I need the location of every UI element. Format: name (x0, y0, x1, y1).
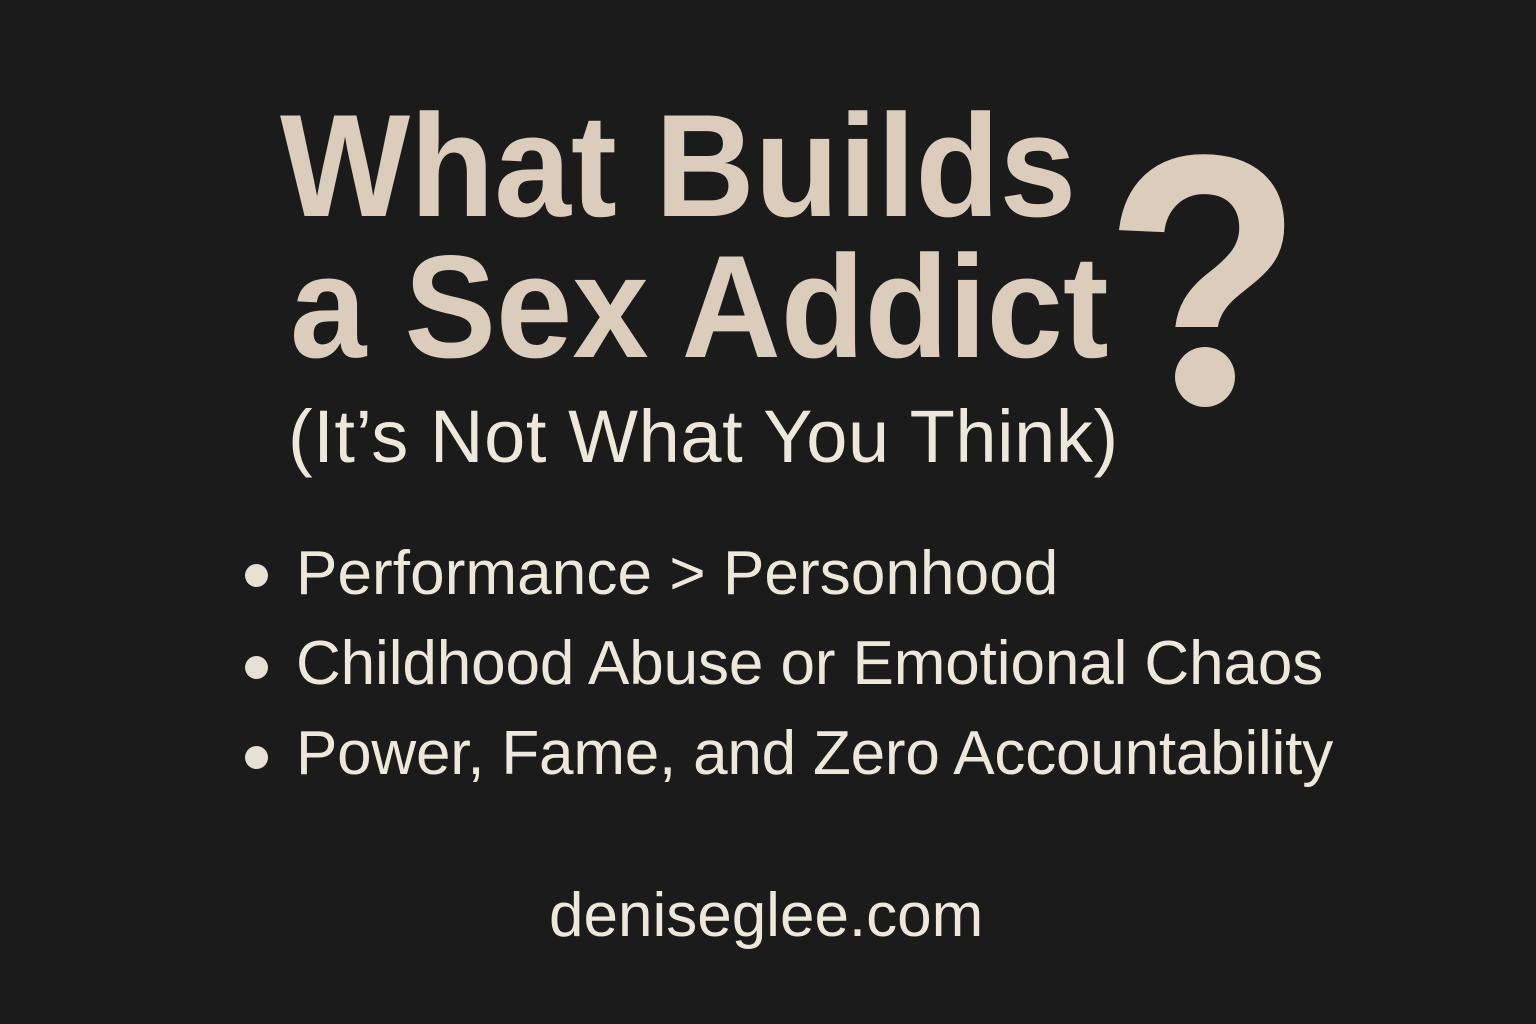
bullet text 2: Childhood Abuse or Emotional Chaos (296, 629, 1323, 698)
icon: large question mark (1104, 150, 1300, 407)
bullet text 3: Power, Fame, and Zero Accountability (296, 719, 1333, 788)
bullet dot 3 (245, 746, 268, 769)
bullet list (245, 539, 1334, 788)
title line 1: What Builds (280, 84, 1076, 247)
title line 2: a Sex Addict (290, 225, 1109, 388)
bullet dot 1 (245, 564, 268, 587)
subtitle: (It’s Not What You Think) (288, 395, 1119, 478)
bullet text 1: Performance > Personhood (296, 539, 1058, 608)
website footer: deniseglee.com (549, 881, 983, 950)
bullet dot 2 (245, 656, 268, 679)
